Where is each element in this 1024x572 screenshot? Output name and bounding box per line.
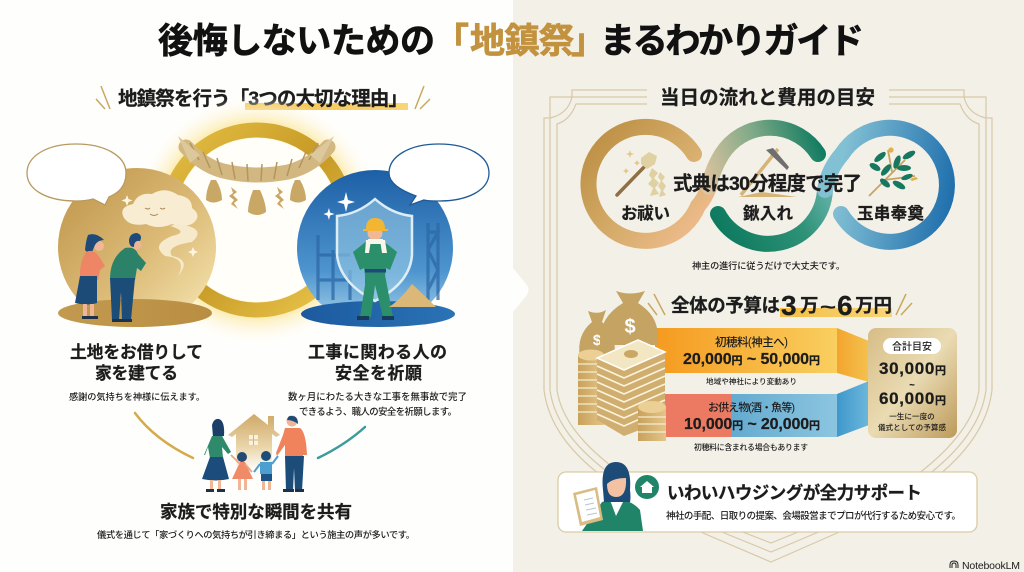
shield [337,199,412,301]
panel: support card: 神社の手配、日取りの提案、会場設営までプロが代行するため安心です。 [666,510,961,522]
panel: total estimate [868,328,957,438]
panel: day flow and cost [544,87,992,562]
text block: safety: 数ヶ月にわたる大きな工事を無事故で完了 [288,391,467,402]
text block: safety [288,343,467,417]
text block: safety: 工事に関わる人の [308,343,447,362]
note: may be included: 初穂料に含まれる場合もあります [694,442,808,452]
heading: budget [648,290,912,321]
panel: total estimate: ~ [909,380,915,390]
heading: budget: 6 [837,290,853,321]
panel: total estimate: 儀式としての予算感 [878,422,946,432]
text block: safety: できるよう、職人の安全を祈願します。 [299,406,457,417]
chart: connected ceremony rings [588,127,947,244]
worker [353,218,397,320]
chart: lower offering band [662,381,869,437]
illustration: land gratitude [27,144,216,327]
text block: land: 家を建てる [95,363,178,383]
title: 」 [571,22,606,61]
title: 「 [434,22,469,61]
ring label: purification: お祓い [621,204,670,223]
tassels [206,180,306,215]
speech bubble right [389,144,489,205]
illustration: family and house [202,414,307,492]
paper streamers [229,187,284,209]
money bag large [600,291,658,345]
chart: upper offering band: 20,000円 ~ 50,000円 [683,351,820,368]
text block: land [69,343,205,402]
chart: lower offering band: 10,000円 ~ 20,000円 [684,416,820,433]
heading: budget: 万円 [855,295,892,316]
sparkles [324,192,355,220]
icon: sacred branch [868,147,918,196]
small coin stack [638,401,666,441]
ring label: offering: 玉串奉奠 [857,204,924,223]
text block: safety: 安全を祈願 [335,364,422,383]
father [276,416,307,492]
heading: budget: 全体の予算は [671,295,780,316]
money bag large: $ [624,316,636,338]
connecting arc gold [135,413,193,458]
title: 後悔しないための [158,22,435,61]
logo: NotebookLM: NotebookLM [962,560,1020,572]
text block: land: 土地をお借りして [70,343,203,362]
ring label: duration: 式典は30分程度で完了 [673,173,862,195]
text block: land: 感謝の気持ちを神様に伝えます。 [69,391,205,402]
note: follow priest: 神主の進行に従うだけで大丈夫です。 [692,260,845,271]
background: right beige half with arrow notch [513,0,1024,572]
panel: three reasons [27,86,489,540]
ring label: hoe: 鍬入れ [743,204,794,223]
illustration: worker safety [297,144,489,327]
cloud spirit [122,190,198,276]
text block: family [97,502,415,540]
bowing man [110,233,146,322]
icon: purification wand [617,150,666,197]
bill stack [597,340,665,436]
chart: upper offering band [655,328,869,382]
icon: ceremonial hoe [738,148,797,197]
text block: family: 儀式を通じて「家づくりへの気持ちが引き締まる」という施主の声が多いです。 [97,529,415,540]
heading: budget: 万 [800,295,819,316]
sand pile [389,284,436,307]
panel: support card: いわいハウジングが全力サポート [667,483,922,503]
girl [231,452,253,490]
panel: total estimate: 合計目安 [892,340,932,353]
sacred ring and rope illustration [132,95,382,345]
panel: total estimate: 一生に一度の [889,411,935,421]
decorative shield frame [544,90,992,562]
connecting arc teal [318,427,365,458]
money bag small: $ [593,332,602,349]
coin stack [578,350,604,425]
house badge [635,475,659,499]
money bag small [579,310,615,358]
chart: lower offering band: お供え物(酒・魚等) [708,400,795,414]
staff illustration [573,462,659,531]
note: varies by region: 地域や神社により変動あり [706,376,797,386]
heading: three reasons: 地鎮祭を行う「3つの大切な理由」 [118,88,408,110]
chart: upper offering band: 初穂料(神主へ) [715,335,788,349]
panel: total estimate: 30,000円 [879,359,946,378]
panel: total estimate: 60,000円 [879,389,946,408]
title [158,22,864,61]
title: まるわかりガイド [600,22,864,61]
bowing woman [75,234,105,319]
scaffolding [318,223,438,300]
boy [254,451,278,490]
heading: budget: 3 [781,290,797,321]
heading: budget: ~ [820,297,836,317]
speech bubble left [27,144,126,205]
illustration: money bags and coins [578,291,666,441]
mother [202,419,231,492]
heading: flow and cost: 当日の流れと費用の目安 [660,87,875,109]
title: 地鎮祭 [470,22,574,61]
panel: support card [558,462,977,532]
clipboard [573,487,603,526]
text block: family: 家族で特別な瞬間を共有 [160,502,352,522]
